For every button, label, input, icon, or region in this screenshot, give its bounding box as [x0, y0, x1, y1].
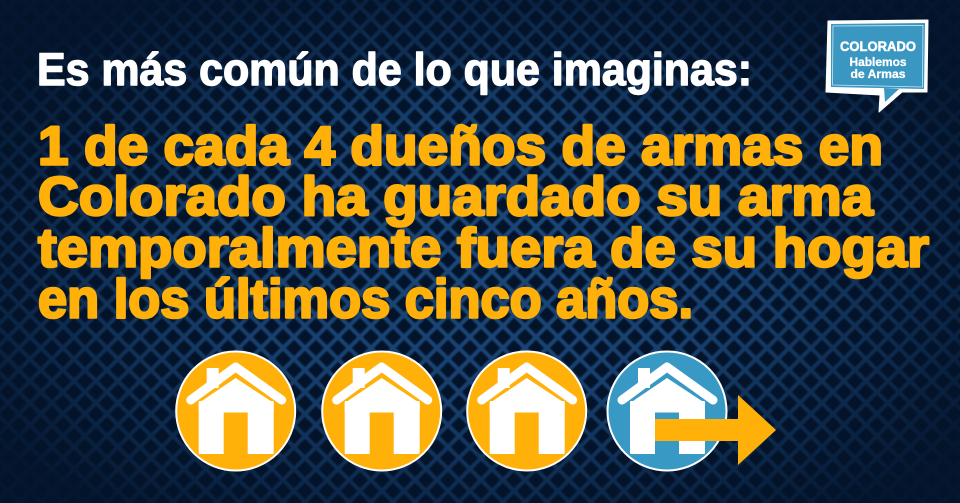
icon: house 1 — [176, 352, 295, 470]
arrow: gun leaving the house — [655, 395, 776, 465]
logo: Colorado Hablemos de Armas speech bubble: Hablemos — [850, 55, 907, 69]
heading: intro line: Es más común de lo que imaginas: — [37, 44, 752, 95]
icon: house 4 (blue) — [608, 352, 726, 470]
icon: house 2 — [322, 352, 441, 470]
logo: Colorado Hablemos de Armas speech bubble: COLORADO — [840, 39, 916, 54]
logo: Colorado Hablemos de Armas speech bubble — [826, 20, 928, 112]
icon: house 3 — [467, 352, 586, 470]
headline statistic: Colorado ha guardado su arma — [38, 165, 873, 227]
headline statistic — [38, 114, 929, 330]
headline statistic: temporalmente fuera de su hogar — [38, 216, 929, 278]
headline statistic: 1 de cada 4 dueños de armas en — [38, 114, 883, 176]
logo: Colorado Hablemos de Armas speech bubble: de Armas — [850, 67, 906, 81]
headline statistic: en los últimos cinco años. — [38, 268, 693, 330]
